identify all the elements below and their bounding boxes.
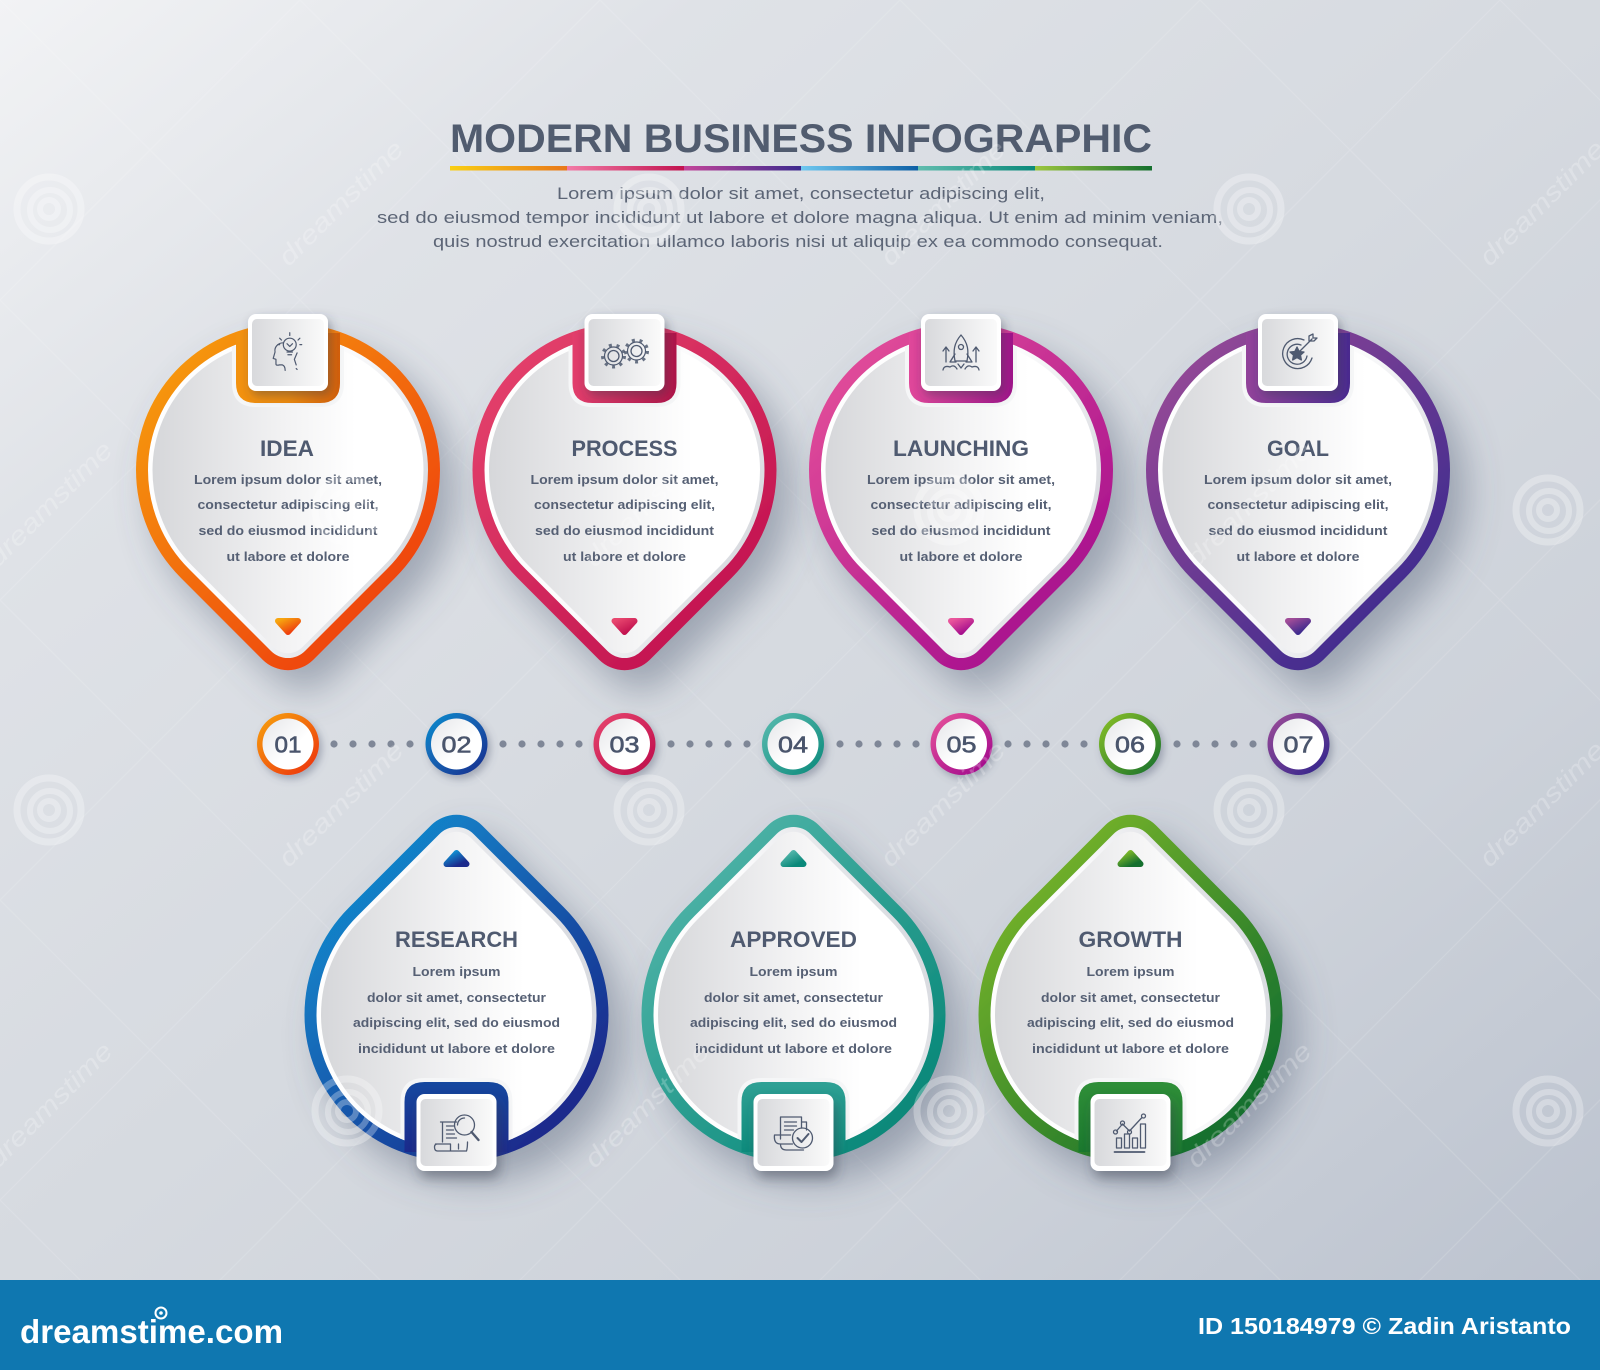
body text [690,964,897,1056]
body text: Lorem ipsum dolor sit amet, [1204,472,1392,487]
body text: ut labore et dolore [1236,549,1360,564]
number badge 07: 07 [1284,732,1314,758]
number badge 03: 03 [610,732,640,758]
watermark text: dreamstime [874,134,1012,272]
watermark text [0,134,1600,1174]
body text: dolor sit amet, consectetur [704,990,883,1005]
body text: Lorem ipsum dolor sit amet, [194,472,382,487]
body text [1027,964,1234,1056]
body text: adipiscing elit, sed do eiusmod [690,1015,897,1030]
icon: gears [602,340,648,367]
number badge 02: 02 [442,732,472,758]
panel: approved [642,815,946,1171]
panel: research [304,815,608,1171]
heading: LAUNCHING [893,436,1029,461]
watermark text: dreamstime [1180,1036,1318,1174]
watermark text: dreamstime [578,435,716,573]
number badge 01: 01 [274,732,302,758]
heading: PROCESS [572,436,678,461]
footer bar [0,1280,1600,1370]
body text: incididunt ut labore et dolore [1032,1041,1229,1056]
body text: consectetur adipiscing elit, [534,497,715,512]
body text: Lorem ipsum [412,964,500,979]
number badge 07 [1268,713,1330,775]
body text [1204,472,1392,564]
body text [353,964,560,1056]
number badge 04 [762,713,824,775]
pin shape [978,815,1282,1171]
body text [867,472,1055,564]
pin shape [472,314,776,670]
heading: IDEA [260,436,314,461]
body text: sed do eiusmod incididunt [872,523,1051,538]
timeline: dotted connectors [330,740,1257,748]
panel: launching [809,314,1113,670]
number badge 05 [930,713,992,775]
body text: sed do eiusmod incididunt [1208,523,1388,538]
icon: target with star and arrow [1283,334,1317,369]
body text: Lorem ipsum dolor sit amet, [867,472,1055,487]
watermark text: dreamstime [1473,134,1600,272]
icon: growth chart [1114,1114,1146,1152]
body text [194,472,382,564]
pin shape [136,314,440,670]
intro paragraph: quis nostrud exercitation ullamco laboris nisi ut aliquip ex ea commodo consequat. [433,232,1163,251]
icon: document with check mark [774,1117,812,1150]
body text: ut labore et dolore [563,549,686,564]
panel: idea [136,314,440,670]
pin shape [1146,314,1450,670]
number badge 05: 05 [946,732,976,758]
intro paragraph: sed do eiusmod tempor incididunt ut labore et dolore magna aliqua. Ut enim ad minim veniam, [377,208,1223,227]
body text: Lorem ipsum [1086,964,1174,979]
icon: rocket [943,335,979,370]
panel: goal [1146,314,1450,670]
watermark text: dreamstime [578,1036,716,1174]
body text [530,472,718,564]
pin shape [642,815,946,1171]
intro paragraph [377,184,1223,251]
body text: sed do eiusmod incididunt [198,523,378,538]
body text: Lorem ipsum dolor sit amet, [530,472,718,487]
watermark swirls [17,177,1580,1143]
body text: adipiscing elit, sed do eiusmod [353,1015,560,1030]
watermark text: dreamstime [1180,435,1318,573]
watermark text: dreamstime [272,134,410,272]
watermark text: dreamstime [1473,735,1600,873]
body text: dolor sit amet, consectetur [367,990,546,1005]
title underline: six colour segments [450,166,1152,170]
icon: head with light bulb [273,333,302,370]
number badge 03 [594,713,656,775]
pin shape [809,314,1113,670]
body text: adipiscing elit, sed do eiusmod [1027,1015,1234,1030]
icon: document with magnifier [434,1115,478,1151]
number badge 01 [257,713,319,775]
number badge 04: 04 [778,732,808,758]
body text: incididunt ut labore et dolore [358,1041,555,1056]
body text: incididunt ut labore et dolore [695,1041,892,1056]
body text: ut labore et dolore [900,549,1022,564]
intro paragraph: Lorem ipsum dolor sit amet, consectetur adipiscing elit, [557,184,1045,203]
watermark text: dreamstime [874,735,1012,873]
footer credit: ID 150184979 © Zadin Aristanto [1198,1313,1571,1339]
heading: APPROVED [730,927,857,952]
body text: consectetur adipiscing elit, [198,497,378,512]
footer logo: dreamstime.com [20,1313,283,1350]
panel: growth [978,815,1282,1171]
title: MODERN BUSINESS INFOGRAPHIC [450,117,1152,161]
body text: consectetur adipiscing elit, [870,497,1052,512]
body text: Lorem ipsum [750,964,838,979]
body text: dolor sit amet, consectetur [1041,990,1220,1005]
number badge 02 [426,713,488,775]
heading: GOAL [1267,436,1329,461]
pin shape [304,815,608,1171]
heading: RESEARCH [395,927,518,952]
number badge 06 [1099,713,1161,775]
body text: consectetur adipiscing elit, [1208,497,1388,512]
body text: sed do eiusmod incididunt [535,523,715,538]
watermark text: dreamstime [272,735,410,873]
number badge 06: 06 [1115,732,1145,758]
body text: ut labore et dolore [226,549,350,564]
heading: GROWTH [1078,927,1182,952]
panel: process [472,314,776,670]
